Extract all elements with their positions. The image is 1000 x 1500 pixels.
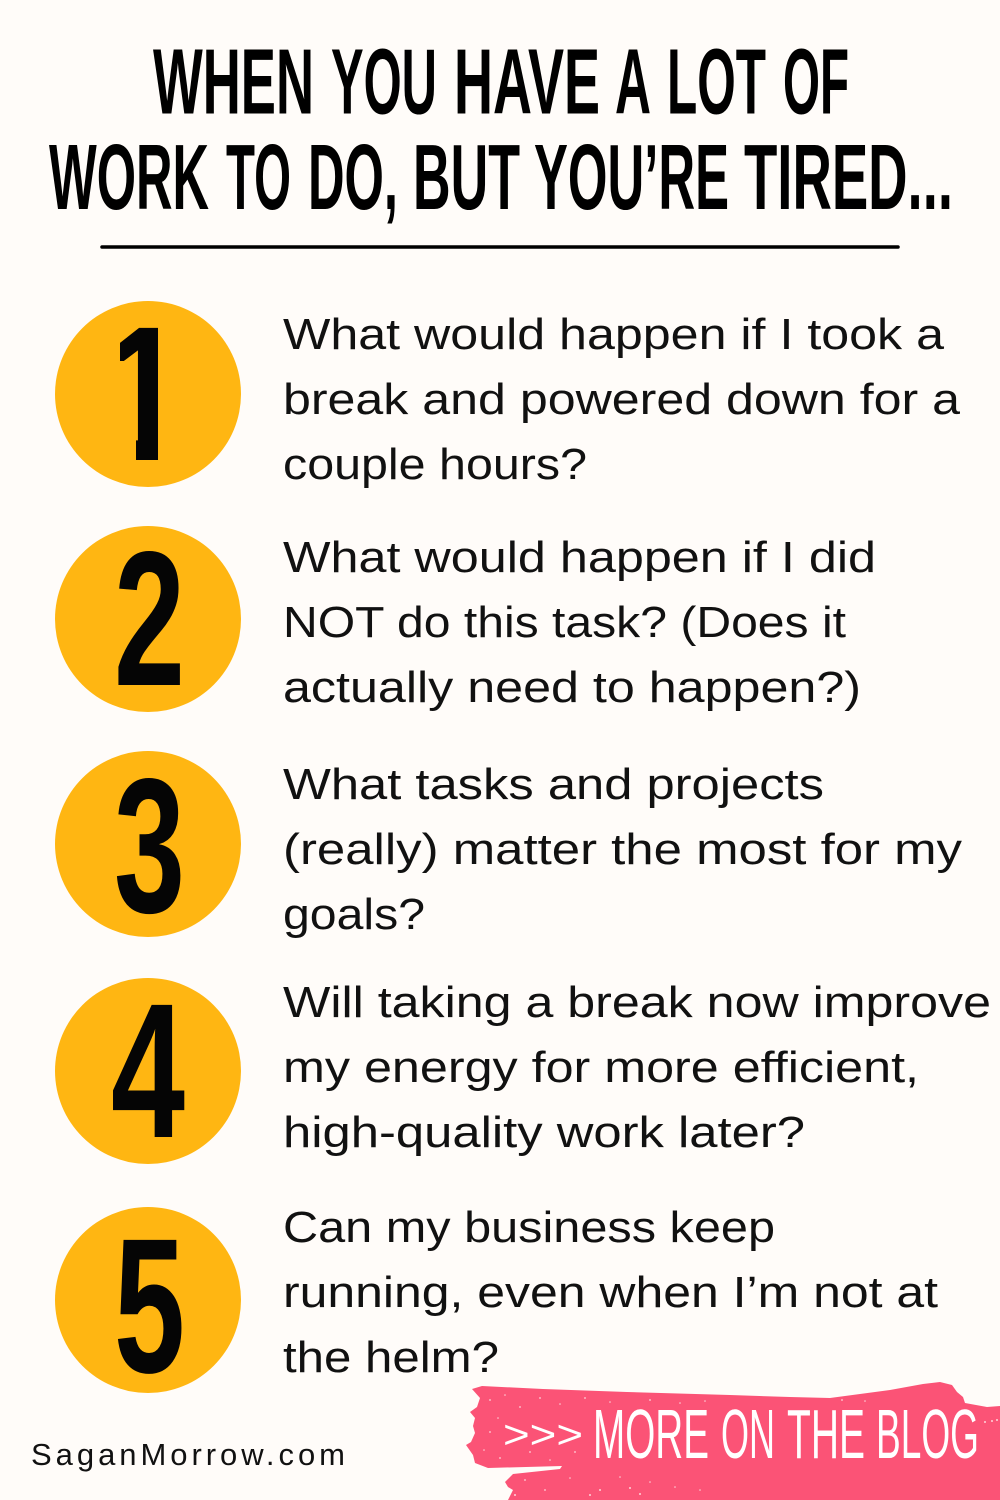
title: WHEN: [153, 30, 314, 134]
item 5 text: [283, 1203, 938, 1382]
banner label: ON: [721, 1395, 775, 1473]
item 1 text: break and powered down for a: [283, 375, 961, 424]
title: DO,: [308, 125, 398, 229]
item 5 text: Can my business keep: [283, 1203, 775, 1252]
title: OF: [783, 30, 849, 134]
item 4 text: Will taking a break now improve: [283, 978, 991, 1027]
website credit: SaganMorrow.com: [31, 1437, 345, 1472]
title: TO: [226, 125, 291, 229]
number badge 3: 3: [114, 738, 185, 953]
title: HAVE: [454, 30, 600, 134]
item 4: [55, 963, 991, 1178]
number badge 5: 5: [114, 1198, 185, 1413]
number badge 4: 4: [111, 963, 185, 1178]
item 3 text: goals?: [283, 890, 425, 939]
chevrons: >>>: [503, 1413, 583, 1457]
number badge 1: [55, 301, 241, 487]
brush stroke background: [466, 1382, 1000, 1500]
number badge 2: [55, 511, 241, 726]
title: YOU’RE: [534, 125, 729, 229]
item 4 text: high-quality work later?: [283, 1108, 805, 1157]
item 5 text: running, even when I’m not at: [283, 1268, 938, 1317]
item 2 text: [283, 533, 876, 712]
title: BUT: [413, 125, 520, 229]
speckle texture: [483, 1394, 998, 1496]
item 5 text: the helm?: [283, 1333, 499, 1382]
title: A: [615, 30, 651, 134]
item 3: [55, 738, 962, 953]
banner label: THE: [787, 1395, 865, 1473]
item 4 text: [283, 978, 991, 1157]
title: WORK: [49, 125, 209, 229]
item 1: [55, 301, 960, 488]
item 3 text: (really) matter the most for my: [283, 825, 962, 874]
item 2 text: What would happen if I did: [283, 533, 876, 582]
item 1 text: What would happen if I took a: [283, 310, 945, 359]
number badge 3: [55, 738, 241, 953]
title: YOU: [331, 30, 437, 134]
call-to-action banner: [466, 1382, 1000, 1500]
item 4 text: my energy for more efficient,: [283, 1043, 919, 1092]
number badge 5: [55, 1198, 241, 1413]
item 5: [55, 1198, 938, 1413]
item 3 text: [283, 760, 962, 939]
title: LOT: [667, 30, 766, 134]
item 2 text: NOT do this task? (Does it: [283, 598, 846, 647]
item 2 text: actually need to happen?): [283, 663, 861, 712]
item 2: [55, 511, 876, 726]
banner label: [593, 1395, 979, 1473]
number badge 2: 2: [114, 511, 185, 726]
title: [49, 30, 953, 229]
banner label: MORE: [593, 1395, 709, 1473]
item 3 text: What tasks and projects: [283, 760, 824, 809]
number badge 4: [55, 963, 241, 1178]
number badge 1: 1: [101, 286, 189, 501]
item 1 text: couple hours?: [283, 440, 587, 489]
item 1 text: [283, 310, 961, 489]
